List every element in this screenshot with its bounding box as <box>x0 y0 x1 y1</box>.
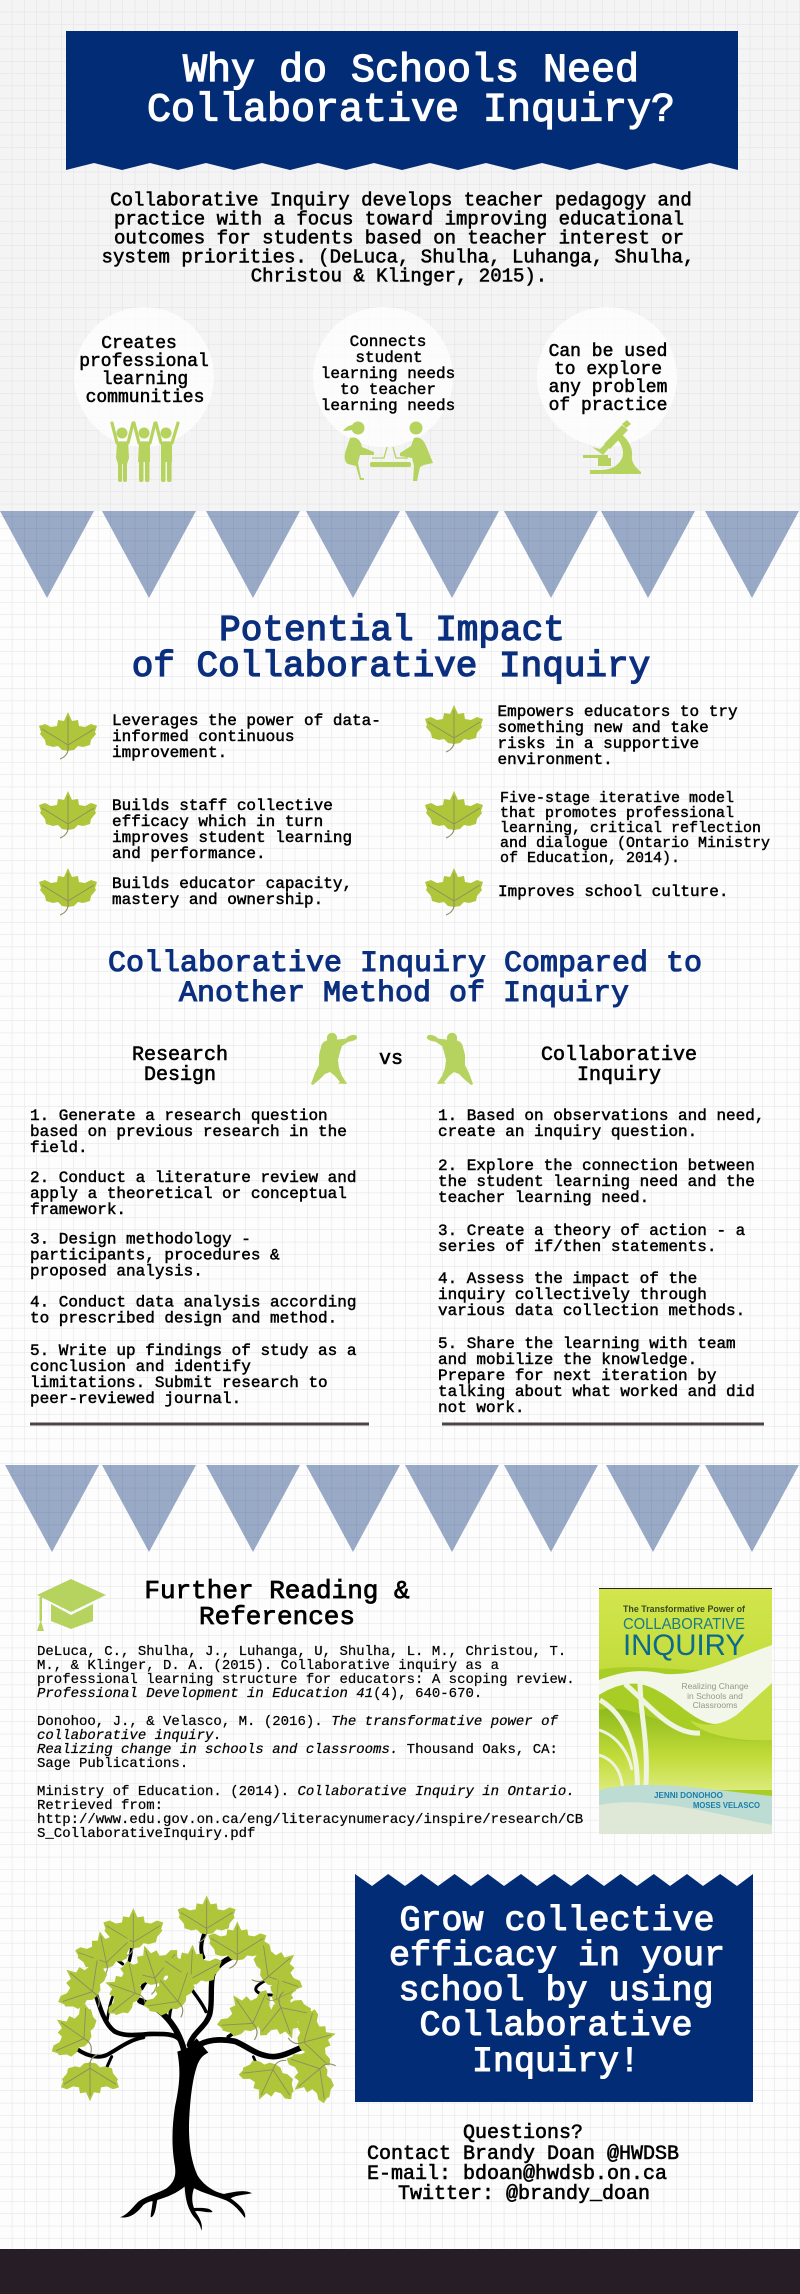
list: research design steps: based on previous research in the <box>30 1123 347 1141</box>
references text: M., & Klinger, D. A. (2015). Collaborative inquiry as a <box>37 1658 499 1674</box>
book cover: JENNI DONOHOO <box>654 1790 723 1800</box>
list: collaborative inquiry steps: inquiry collectively through <box>438 1286 707 1304</box>
list: research design steps: conclusion and identify <box>30 1358 251 1376</box>
list: collaborative inquiry steps: create an inquiry question. <box>438 1123 697 1141</box>
benefit: explore any problem <box>537 307 677 474</box>
list: research design steps: field. <box>30 1139 88 1157</box>
tree illustration <box>40 1895 349 2231</box>
intro text: outcomes for students based on teacher interest or <box>114 228 684 250</box>
heading: potential impact <box>132 610 650 687</box>
benefit: professional learning communities: Creates <box>101 334 177 354</box>
list: collaborative inquiry steps: series of if/then statements. <box>438 1238 716 1256</box>
book cover: The Transformative Power of <box>623 1604 746 1615</box>
impact item: data-informed improvement: Leverages the power of data- <box>112 712 381 730</box>
heading: further reading: Further Reading & <box>144 1576 410 1606</box>
icon: three people with arms raised <box>112 423 178 482</box>
references text: Ministry of Education. (2014). Collaborative Inquiry in Ontario. <box>37 1784 575 1800</box>
impact item: empowers educators: environment. <box>498 751 613 769</box>
closing banner: Collaborative <box>419 2006 693 2046</box>
impact item: collective efficacy: efficacy which in turn <box>112 813 323 831</box>
heading: further reading: References <box>199 1602 355 1632</box>
benefit: professional learning communities: communities <box>86 388 204 408</box>
contact details: E-mail: bdoan@hwdsb.on.ca <box>367 2163 667 2186</box>
column heading: collaborative inquiry: Inquiry <box>577 1064 661 1087</box>
contact details <box>367 2122 679 2206</box>
list: collaborative inquiry steps: 3. Create a theory of action - a <box>438 1222 746 1240</box>
list: research design steps <box>30 1107 357 1408</box>
impact item: collective efficacy <box>39 791 352 863</box>
benefit: connects learning needs <box>313 307 455 481</box>
book cover: Realizing Change <box>681 1681 749 1691</box>
list: collaborative inquiry steps: and mobilize the knowledge. <box>438 1351 697 1369</box>
references text <box>37 1644 583 1842</box>
benefit: explore any problem: of practice <box>549 396 667 416</box>
impact item: collective efficacy: and performance. <box>112 845 266 863</box>
list: research design steps: 4. Conduct data analysis according <box>30 1294 356 1312</box>
list: research design steps: participants, procedures & <box>30 1246 280 1264</box>
column heading: research design: Research <box>132 1044 228 1067</box>
heading: potential impact: of Collaborative Inquiry <box>132 646 650 687</box>
list: research design steps: 5. Write up findings of study as a <box>30 1342 357 1360</box>
benefit: connects learning needs: learning needs <box>321 397 455 415</box>
heading: potential impact: Potential Impact <box>219 610 565 651</box>
footer bar <box>0 2249 800 2294</box>
icon: right boxer <box>427 1033 473 1085</box>
list: collaborative inquiry steps: various data collection methods. <box>438 1302 745 1320</box>
impact item: five-stage model: learning, critical reflection <box>500 820 761 837</box>
impact item: school culture <box>425 868 728 915</box>
impact item: data-informed improvement: informed continuous <box>112 728 294 746</box>
closing banner <box>355 1874 753 2102</box>
list: collaborative inquiry steps: talking about what worked and did <box>438 1383 755 1401</box>
references text: DeLuca, C., Shulha, J., Luhanga, U, Shulha, L. M., Christou, T. <box>37 1644 566 1660</box>
list: collaborative inquiry steps <box>438 1107 764 1417</box>
benefit: professional learning communities <box>74 307 214 482</box>
title banner <box>66 31 738 170</box>
references text: Professional Development in Education 41(4), 640-670. <box>37 1686 482 1702</box>
references text: Donohoo, J., & Velasco, M. (2016). The transformative power of <box>37 1714 558 1730</box>
impact item: collective efficacy: improves student learning <box>112 829 352 847</box>
references text: professional learning structure for educators: A scoping review. <box>37 1672 575 1688</box>
heading: further reading <box>144 1576 410 1632</box>
references text: Realizing change in schools and classrooms. Thousand Oaks, CA: <box>37 1742 558 1758</box>
book cover: MOSES VELASCO <box>693 1800 760 1810</box>
references text: Retrieved from: <box>37 1798 163 1814</box>
book cover: in Schools and <box>687 1691 743 1701</box>
impact item: empowers educators: something new and take <box>498 719 709 737</box>
closing banner: efficacy in your <box>389 1936 725 1976</box>
impact item: school culture: Improves school culture. <box>498 883 728 901</box>
heading: comparison: Collaborative Inquiry Compared to <box>108 947 702 981</box>
benefit: explore any problem: to explore <box>554 360 662 380</box>
references text: collaborative inquiry. <box>37 1728 222 1744</box>
bunting row one <box>0 511 799 598</box>
list: research design steps: 1. Generate a research question <box>30 1107 328 1125</box>
book cover: INQUIRY <box>623 1629 745 1662</box>
impact item: data-informed improvement <box>39 712 381 762</box>
title banner: Why do Schools Need <box>183 49 639 94</box>
list: collaborative inquiry steps: 2. Explore the connection between <box>438 1157 755 1175</box>
list: research design steps: limitations. Submit research to <box>30 1374 328 1392</box>
list: research design steps: peer-reviewed journal. <box>30 1390 241 1408</box>
bunting row two <box>5 1465 799 1552</box>
book cover <box>599 1588 772 1834</box>
icon: microscope <box>583 420 641 474</box>
impact item: five-stage model <box>425 790 770 867</box>
heading: comparison: Another Method of Inquiry <box>179 977 629 1011</box>
impact item: data-informed improvement: improvement. <box>112 744 227 762</box>
impact item: educator capacity: mastery and ownership. <box>112 891 323 909</box>
list: collaborative inquiry steps: Prepare for next iteration by <box>438 1367 717 1385</box>
intro text: Christou & Klinger, 2015). <box>251 266 547 288</box>
heading: comparison <box>108 947 702 1011</box>
list: collaborative inquiry steps: teacher learning need. <box>438 1189 649 1207</box>
icon: left boxer <box>311 1033 357 1085</box>
icon: two people at laptops <box>343 422 433 481</box>
benefit: professional learning communities: professional <box>79 352 209 372</box>
impact item: educator capacity: Builds educator capacity, <box>112 875 352 893</box>
references text: Sage Publications. <box>37 1756 188 1772</box>
list: research design steps: 2. Conduct a literature review and <box>30 1169 356 1187</box>
benefit: connects learning needs: learning needs <box>321 365 455 383</box>
contact details: Contact Brandy Doan @HWDSB <box>367 2143 679 2166</box>
list: collaborative inquiry steps: 5. Share the learning with team <box>438 1335 736 1353</box>
book cover: COLLABORATIVE <box>623 1616 745 1633</box>
benefit: explore any problem: Can be used <box>549 342 667 362</box>
list: research design steps: 3. Design methodology - <box>30 1230 251 1248</box>
impact item: five-stage model: and dialogue (Ontario Ministry <box>500 835 770 852</box>
impact item: five-stage model: that promotes professional <box>500 805 734 822</box>
list: research design steps: apply a theoretical or conceptual <box>30 1185 347 1203</box>
list: collaborative inquiry steps: 1. Based on observations and need, <box>438 1107 764 1125</box>
impact item: empowers educators: risks in a supportive <box>498 735 699 753</box>
impact item: empowers educators <box>425 703 738 769</box>
column heading: collaborative inquiry: Collaborative <box>541 1044 697 1067</box>
impact item: five-stage model: Five-stage iterative model <box>500 790 734 807</box>
benefit: explore any problem: any problem <box>549 378 667 398</box>
benefit: connects learning needs: Connects <box>350 333 426 351</box>
closing banner: Inquiry! <box>472 2042 640 2082</box>
icon: graduation cap <box>37 1579 106 1631</box>
list: collaborative inquiry steps: the student learning need and the <box>438 1173 755 1191</box>
impact item: five-stage model: of Education, 2014). <box>500 850 680 867</box>
list: research design steps: to prescribed design and method. <box>30 1310 337 1328</box>
benefit: connects learning needs: student <box>355 349 423 367</box>
vs label: vs <box>379 1048 403 1071</box>
benefit: professional learning communities: learning <box>102 370 188 390</box>
references text: http://www.edu.gov.on.ca/eng/literacynumeracy/inspire/research/CB <box>37 1812 583 1828</box>
closing banner: school by using <box>398 1971 714 2011</box>
column heading: research design <box>132 1044 228 1087</box>
title banner: Collaborative Inquiry? <box>147 88 675 134</box>
contact details: Twitter: @brandy_doan <box>398 2183 650 2206</box>
references text: S_CollaborativeInquiry.pdf <box>37 1826 255 1842</box>
list: collaborative inquiry steps: 4. Assess the impact of the <box>438 1270 697 1288</box>
benefit: connects learning needs: to teacher <box>340 381 436 399</box>
closing banner: Grow collective <box>399 1901 715 1941</box>
list: research design steps: framework. <box>30 1201 126 1219</box>
intro text: system priorities. (DeLuca, Shulha, Luhanga, Shulha, <box>102 246 694 268</box>
intro text: practice with a focus toward improving educational <box>114 208 684 230</box>
intro text: Collaborative Inquiry develops teacher pedagogy and <box>110 190 692 212</box>
list: collaborative inquiry steps: not work. <box>438 1399 524 1417</box>
contact details: Questions? <box>463 2122 583 2145</box>
impact item: collective efficacy: Builds staff collective <box>112 797 333 815</box>
column heading: collaborative inquiry <box>541 1044 697 1087</box>
impact item: educator capacity <box>39 868 352 915</box>
column heading: research design: Design <box>144 1064 216 1087</box>
intro text <box>102 190 694 288</box>
list: research design steps: proposed analysis. <box>30 1262 203 1280</box>
book cover: Classrooms <box>693 1700 737 1710</box>
impact item: empowers educators: Empowers educators to try <box>498 703 738 721</box>
